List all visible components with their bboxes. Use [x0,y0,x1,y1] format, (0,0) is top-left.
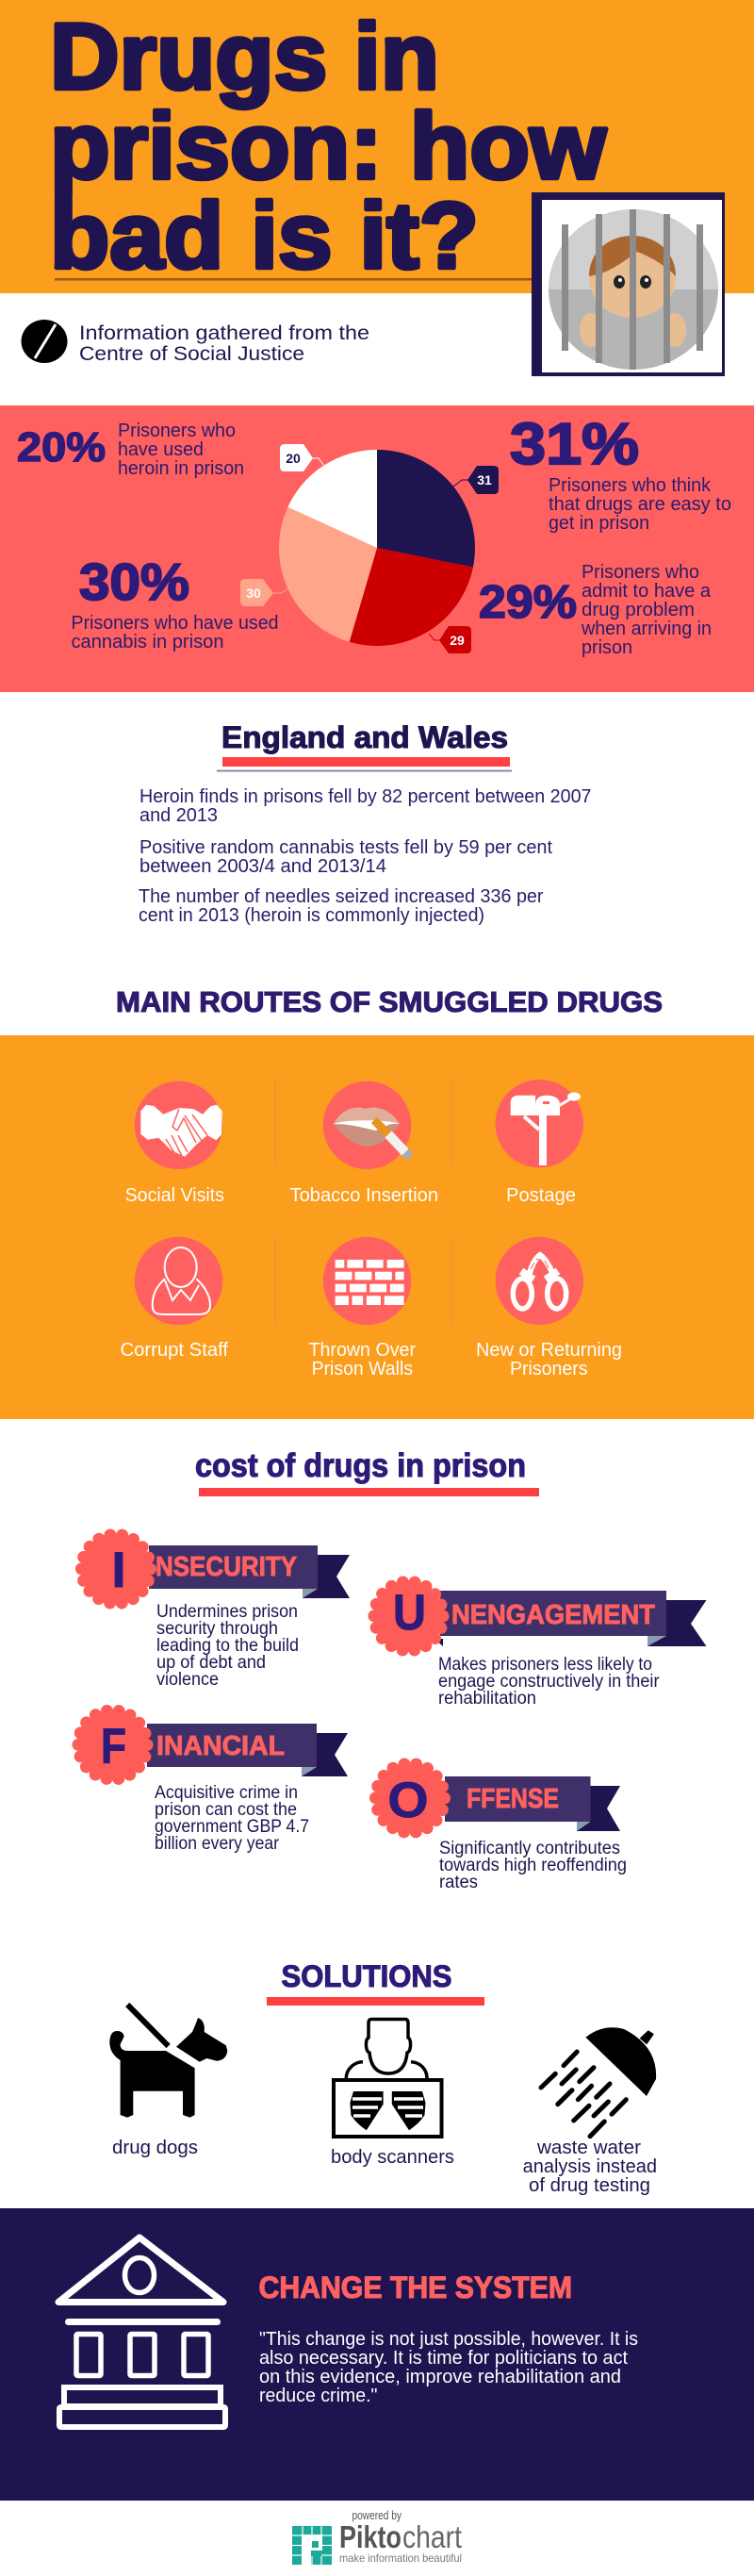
cost: insecurity: leading to the build [156,1636,299,1656]
cost: unengagement: rehabilitation [438,1689,536,1709]
cost: unengagement: NENGAGEMENT [451,1600,655,1630]
stat: 29%: 29% [479,577,577,628]
cost: financial [77,1710,348,1854]
route: corrupt staff: Corrupt Staff [121,1340,228,1361]
route: postage [496,1080,583,1206]
quote: also necessary. It is time for politicians to act [259,2348,628,2369]
footer: Piktochart logo: make information beautiful [339,2551,462,2565]
route: social visits: Social Visits [125,1185,224,1206]
text block: England and Wales facts [139,786,592,926]
pie label 31 [453,466,499,494]
cost: offense: O [388,1773,428,1828]
stat: 31%: 31% [510,412,639,477]
panel: smuggling routes [0,1035,754,1419]
stat: 31%: Prisoners who think [549,475,712,496]
heading: England and Wales: England and Wales [221,720,508,754]
title [50,4,607,288]
pie label 30: 30 [246,586,261,601]
route: tobacco insertion: Tobacco Insertion [290,1185,438,1206]
cost: insecurity: I [111,1543,126,1598]
footer: Piktochart logo [292,2508,462,2565]
solution: body scanners: body scanners [331,2147,454,2168]
route: social visits [125,1082,224,1206]
stat: 29%: drug problem [582,600,695,620]
panel: change the system [0,2208,754,2501]
route: new or returning prisoners: New or Returning [476,1340,622,1361]
stat: 29%: when arriving in [581,619,712,639]
quote: "This change is not just possible, however. It is [259,2329,638,2350]
source text: Centre of Social Justice [79,343,304,365]
cost: unengagement [373,1581,707,1709]
cost: financial: prison can cost the [155,1800,297,1820]
panel: prisoner statistics [0,405,754,692]
heading: cost of drugs in prison: cost of drugs in prison [195,1447,526,1484]
heading: main routes: MAIN ROUTES OF SMUGGLED DRUGS [116,985,663,1018]
cost: offense: rates [439,1873,478,1892]
footer: Piktochart logo: powered by [352,2508,402,2522]
route: tobacco insertion [290,1082,438,1206]
stat: 31% [510,412,731,534]
cost: offense: towards high reoffending [439,1856,627,1875]
cost: insecurity: NSECURITY [156,1552,297,1582]
text block: England and Wales facts: The number of needles seized increased 336 per [139,886,544,907]
stat: 29%: admit to have a [582,581,712,602]
source text [79,322,369,365]
cost: insecurity: up of debt and [156,1653,266,1673]
solution: body scanners [331,2020,454,2168]
stat: 31%: that drugs are easy to [549,494,731,515]
pie label 29: 29 [450,633,465,648]
stat: 31%: get in prison [549,513,649,534]
pie label 29 [429,626,471,653]
stat: 20%: Prisoners who [118,421,236,441]
title: Drugs in [50,4,439,108]
text block: England and Wales facts: Positive random cannabis tests fell by 59 per cent [139,837,552,858]
cost: insecurity: violence [156,1670,219,1690]
route: thrown over prison walls: Prison Walls [312,1359,413,1379]
cost: unengagement: U [393,1585,426,1641]
solution: drug dogs: drug dogs [112,2138,198,2158]
heading: solutions [267,1959,484,2006]
solution: waste water analysis [523,2027,657,2196]
cost: offense: FFENSE [467,1784,559,1814]
icon: prisoner behind bars [532,192,725,376]
cost: unengagement: engage constructively in their [438,1672,660,1692]
stat: 29%: Prisoners who [582,562,699,583]
pie label 30 [240,579,288,606]
route: corrupt staff [121,1237,228,1361]
cost: offense [375,1763,627,1892]
solution: waste water analysis: waste water [536,2138,641,2158]
source text: Information gathered from the [79,322,369,344]
stat: 30% [72,553,279,652]
heading: solutions: SOLUTIONS [281,1959,452,1993]
title: prison: how [50,93,607,198]
solution: waste water analysis: of drug testing [529,2175,650,2196]
pie label 20: 20 [286,451,301,466]
cost: insecurity [81,1534,350,1690]
stat: 30%: Prisoners who have used [72,613,279,634]
heading: England and Wales [217,720,512,771]
stat: 29% [479,562,712,658]
cost: unengagement: Makes prisoners less likely to [438,1655,652,1675]
stat: 20%: 20% [17,424,106,471]
stat: 20%: heroin in prison [118,458,244,479]
cost: financial: F [101,1719,126,1775]
cost: financial: government GBP 4.7 [155,1817,309,1837]
route: postage: Postage [506,1185,576,1206]
quote: on this evidence, improve rehabilitation and [259,2367,621,2387]
pie label 31: 31 [477,472,492,487]
solution: drug dogs [109,2005,227,2158]
stat: 30%: cannabis in prison [72,632,224,652]
route: new or returning prisoners: Prisoners [510,1359,588,1379]
stat: 20%: have used [118,439,204,460]
route: thrown over prison walls: Thrown Over [309,1340,416,1361]
quote: reduce crime." [259,2386,377,2406]
panel: header [0,0,754,293]
cost: insecurity: security through [156,1619,278,1639]
text block: England and Wales facts: cent in 2013 (heroin is commonly injected) [139,905,484,926]
route: new or returning prisoners [476,1237,622,1379]
cost: offense: Significantly contributes [439,1839,620,1858]
text block: England and Wales facts: and 2013 [139,805,218,826]
footer: Piktochart logo: Pikto [339,2519,402,2554]
quote [259,2329,638,2406]
stat: 30%: 30% [79,553,189,611]
heading: change the system: CHANGE THE SYSTEM [258,2271,572,2304]
stat: 20% [17,421,244,479]
route: thrown over prison walls [309,1237,416,1379]
stat: 29%: prison [582,637,632,658]
footer: Piktochart logo: chart [402,2519,462,2554]
cost: financial: billion every year [155,1834,280,1854]
cost: insecurity: Undermines prison [156,1602,298,1622]
pie label 20 [280,444,323,471]
cost: financial: INANCIAL [156,1731,285,1761]
cost: financial: Acquisitive crime in [155,1783,298,1803]
icon: pill source mark [21,320,68,363]
pie chart [279,450,475,646]
text block: England and Wales facts: between 2003/4 and 2013/14 [139,856,386,877]
icon: courthouse [58,2237,225,2427]
title: bad is it? [50,183,479,288]
text block: England and Wales facts: Heroin finds in prisons fell by 82 percent between 2007 [139,786,592,807]
solution: waste water analysis: analysis instead [523,2156,657,2177]
